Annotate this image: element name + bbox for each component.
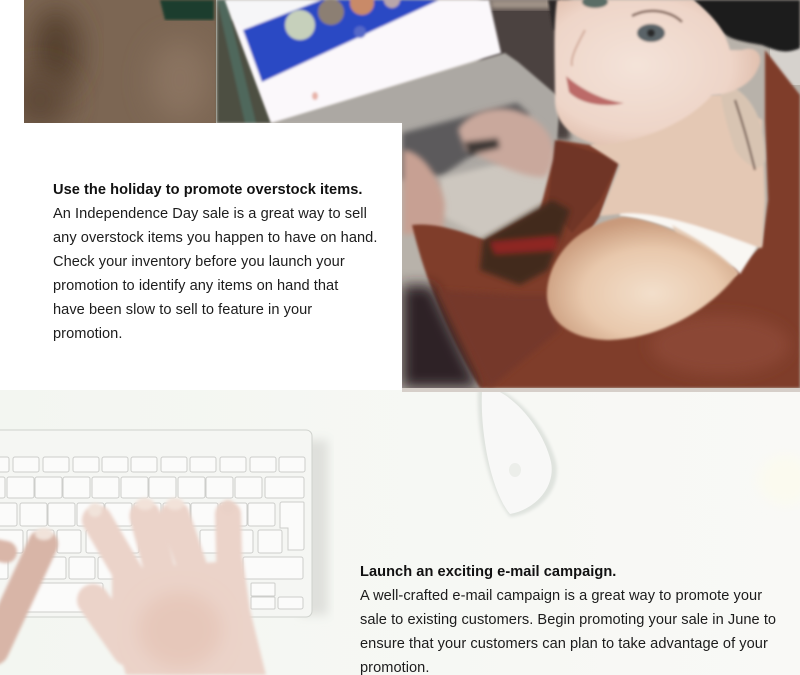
text: overstock tip [53, 182, 377, 342]
mouse [478, 390, 557, 517]
text: overstock tip: any overstock items you happen to have on hand. [53, 230, 377, 246]
text: overstock tip: promotion to identify any items on hand that [53, 278, 338, 294]
keyboard [0, 430, 328, 617]
text: overstock tip: promotion. [53, 326, 122, 342]
text: e-mail campaign tip: A well-crafted e-mail campaign is a great way to promote your [360, 588, 762, 604]
laptop base [281, 52, 560, 172]
hair [693, 0, 800, 51]
cardigan [412, 50, 800, 388]
text: e-mail campaign tip [360, 564, 776, 675]
photo: woman smiling at a laptop [24, 0, 800, 392]
text: e-mail campaign tip: sale to existing customers. Begin promoting your sale in June to [360, 612, 776, 628]
shoulder [547, 217, 738, 340]
hands on laptop [403, 109, 554, 235]
panel: overstock text card [0, 123, 402, 390]
text: overstock tip: An Independence Day sale is a great way to sell [53, 206, 367, 222]
text: overstock tip: have been slow to sell to feature in your [53, 302, 312, 318]
laptop screen [225, 0, 501, 123]
white strap [620, 213, 757, 274]
text: e-mail campaign tip: ensure that your customers can plan to take advantage of your [360, 636, 768, 652]
face [554, 0, 760, 145]
text: overstock tip: Use the holiday to promote overstock items. [53, 182, 363, 198]
laptop bezel [217, 0, 272, 123]
brown table [24, 0, 217, 123]
photo: hands typing on a white keyboard [0, 390, 800, 675]
dark background behind laptop [480, 0, 570, 140]
text: overstock tip: Check your inventory before you launch your [53, 254, 345, 270]
text: e-mail campaign tip: Launch an exciting e-mail campaign. [360, 564, 616, 580]
hands [0, 498, 266, 675]
neck and chest [590, 89, 766, 278]
